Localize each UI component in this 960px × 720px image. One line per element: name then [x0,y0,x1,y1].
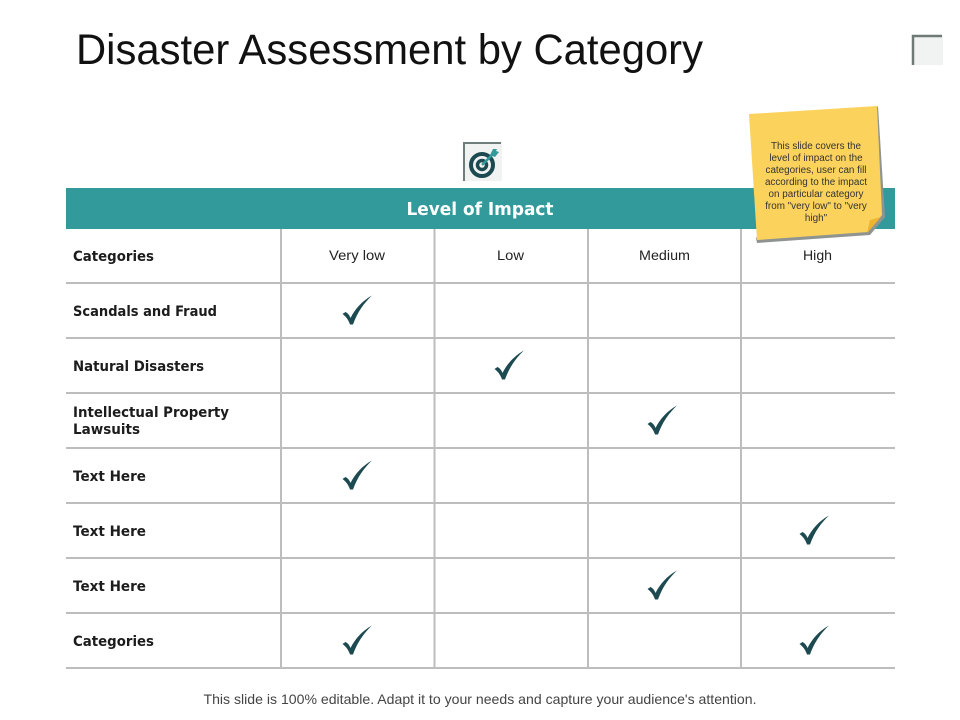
row labels: Lawsuits [73,422,140,438]
row labels: Intellectual Property [73,405,229,421]
column headers: Low [497,247,525,263]
icon: target with arrow [463,142,502,181]
row labels: Categories [73,634,154,650]
callout text: categories, user can fill [766,165,866,176]
callout text: This slide covers the [771,141,862,152]
title: Disaster Assessment by Category [76,26,703,74]
table [66,188,895,668]
row labels: Text Here [73,524,146,540]
row labels: Scandals and Fraud [73,304,217,320]
callout text: high" [805,213,828,224]
row labels: Text Here [73,579,146,595]
check marks [342,296,829,654]
column headers: Medium [639,247,690,263]
row labels: Categories [73,249,154,265]
column headers: Very low [329,247,386,263]
callout text: according to the impact [765,177,867,188]
column headers: High [803,247,832,263]
table header band [66,188,895,229]
row labels: Natural Disasters [73,359,204,375]
callout text: level of impact on the [769,153,863,164]
row labels [73,249,229,650]
sticky note callout [749,106,885,243]
row labels: Text Here [73,469,146,485]
icon: corner square placeholder [912,35,943,65]
callout text: from "very low" to "very [765,201,867,212]
column headers [329,247,832,263]
callout text: on particular category [769,189,864,200]
callout text [765,141,867,224]
footer note: This slide is 100% editable. Adapt it to your needs and capture your audience's attention. [204,691,756,707]
table header title: Level of Impact [406,200,554,220]
